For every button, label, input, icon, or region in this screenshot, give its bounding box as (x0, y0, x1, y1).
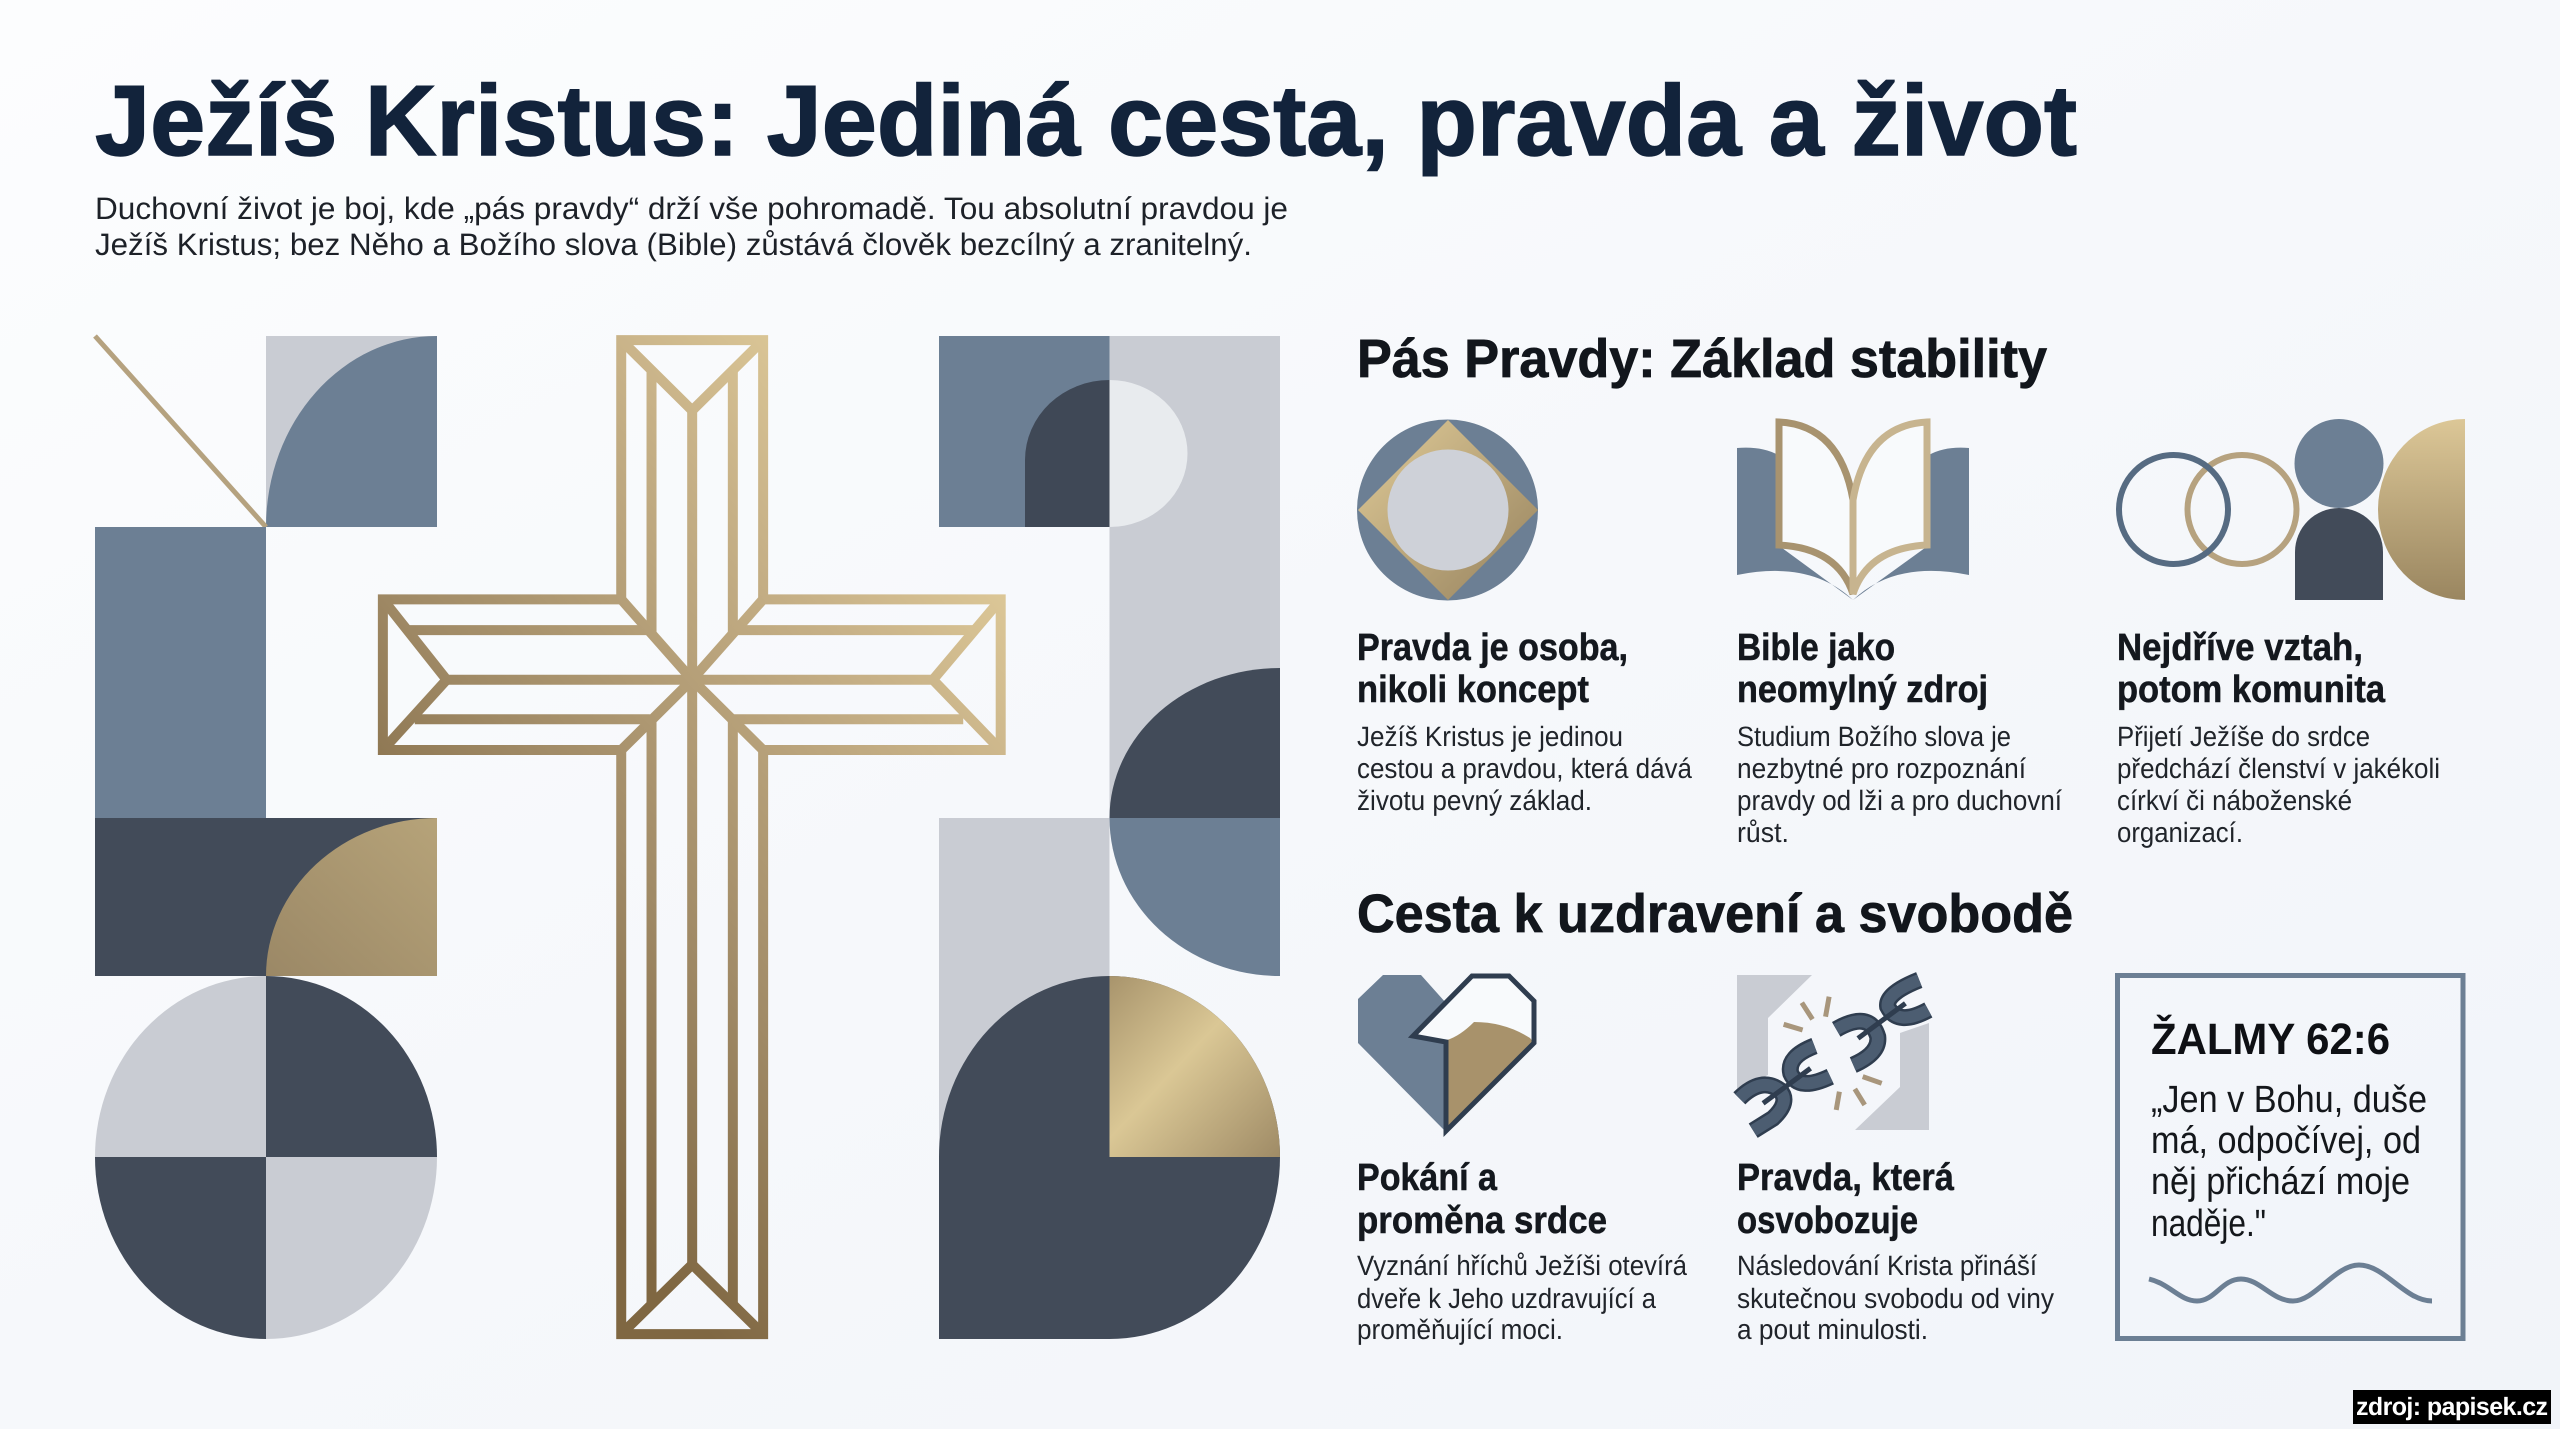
card text: Vyznání hříchů Ježíši otevírá (1357, 1250, 1687, 1281)
panel: geometric composition left (95, 336, 437, 1339)
callout heading: ŽALMY 62:6 (2151, 1014, 2390, 1064)
card heading (2117, 627, 2386, 711)
shape: gold quarter (1110, 976, 1280, 1157)
callout: Žalmy 62:6 (2118, 976, 2463, 1338)
card heading: potom komunita (2117, 669, 2386, 711)
shape: grey square with slate quarter (266, 336, 437, 527)
card heading (1737, 627, 1988, 711)
shape: grey rectangle (939, 818, 1110, 1158)
card text: proměňující moci. (1357, 1314, 1563, 1345)
shape: dark rectangle with gold quarter (95, 818, 437, 976)
card: Pokání (1357, 975, 1687, 1345)
card heading: Pravda je osoba, (1357, 627, 1628, 669)
title: Ježíš Kristus: Jediná cesta, pravda a život (95, 65, 2077, 177)
icon: circle with diamond (1357, 420, 1538, 600)
card text (2117, 721, 2440, 848)
card text (1357, 1250, 1687, 1345)
card: Bible (1737, 422, 2062, 848)
card text (1737, 721, 2062, 848)
shape: grey column with dark quarter (1110, 336, 1280, 818)
callout quote: „Jen v Bohu, duše (2151, 1079, 2427, 1121)
card heading: proměna srdce (1357, 1200, 1607, 1242)
card text: Následování Krista přináší (1737, 1250, 2037, 1281)
card heading: neomylný zdroj (1737, 669, 1988, 711)
callout quote: má, odpočívej, od (2151, 1120, 2421, 1162)
card heading: osvobozuje (1737, 1200, 1918, 1242)
card: Nejdříve vztah (2117, 419, 2465, 848)
icon: heart (1358, 975, 1534, 1132)
card text: skutečnou svobodu od viny (1737, 1283, 2054, 1314)
icon: broken chain (1737, 975, 1929, 1131)
callout quote: naděje." (2151, 1203, 2266, 1245)
callout frame (2118, 976, 2463, 1338)
subtitle (95, 191, 1288, 262)
icon: open book (1737, 422, 1969, 600)
card text: a pout minulosti. (1737, 1314, 1928, 1345)
card heading (1357, 627, 1628, 711)
card heading: Bible jako (1737, 627, 1895, 669)
shape: gold diagonal line (95, 336, 266, 527)
callout quote (2151, 1079, 2427, 1245)
card text: organizací. (2117, 817, 2243, 848)
subtitle: Ježíš Kristus; bez Něho a Božího slova (Bible) zůstává člověk bezcílný a zranitelný. (95, 227, 1252, 262)
card text: růst. (1737, 817, 1789, 848)
card heading: Pokání a (1357, 1157, 1498, 1199)
card text: Ježíš Kristus je jedinou (1357, 721, 1623, 752)
card heading: Pravda, která (1737, 1157, 1955, 1199)
card text: nezbytné pro rozpoznání (1737, 753, 2026, 784)
shape: slate quarter (1110, 818, 1280, 976)
card heading (1357, 1157, 1607, 1242)
card text: církví či náboženské (2117, 785, 2352, 816)
card: Pravda je osoba (1357, 420, 1692, 816)
icon: rings and figure (2119, 419, 2465, 600)
shape: slate rectangle (95, 527, 266, 818)
shape: dark arch (939, 976, 1280, 1339)
callout quote: něj přichází moje (2151, 1161, 2410, 1203)
card text: dveře k Jeho uzdravující a (1357, 1283, 1656, 1314)
subtitle: Duchovní život je boj, kde „pás pravdy“ drží vše pohromadě. Tou absolutní pravdou je (95, 191, 1288, 226)
card text: životu pevný základ. (1357, 785, 1592, 816)
wave line (2149, 1265, 2432, 1301)
heading: Pás Pravdy: Pás Pravdy: Základ stability (1357, 329, 2047, 389)
card text: Přijetí Ježíše do srdce (2117, 721, 2370, 752)
card text: pravdy od lži a pro duchovní (1737, 785, 2062, 816)
card text: předchází členství v jakékoli (2117, 753, 2440, 784)
card heading (1737, 1157, 1955, 1242)
panel: geometric composition right (939, 336, 1280, 1339)
heading: Cesta k uzdravení: Cesta k uzdravení a svobodě (1357, 884, 2073, 944)
shape: slate square with dark arch and pale half circle (939, 336, 1188, 527)
shape: quartered circle (95, 976, 437, 1339)
card text (1357, 721, 1692, 816)
source label: zdroj: papisek.cz (2356, 1393, 2548, 1421)
card: Pravda osvobozuje (1737, 975, 2054, 1345)
card heading: nikoli koncept (1357, 669, 1589, 711)
card text (1737, 1250, 2054, 1345)
card text: Studium Božího slova je (1737, 721, 2011, 752)
cross (383, 340, 1001, 1334)
card text: cestou a pravdou, která dává (1357, 753, 1692, 784)
card heading: Nejdříve vztah, (2117, 627, 2363, 669)
